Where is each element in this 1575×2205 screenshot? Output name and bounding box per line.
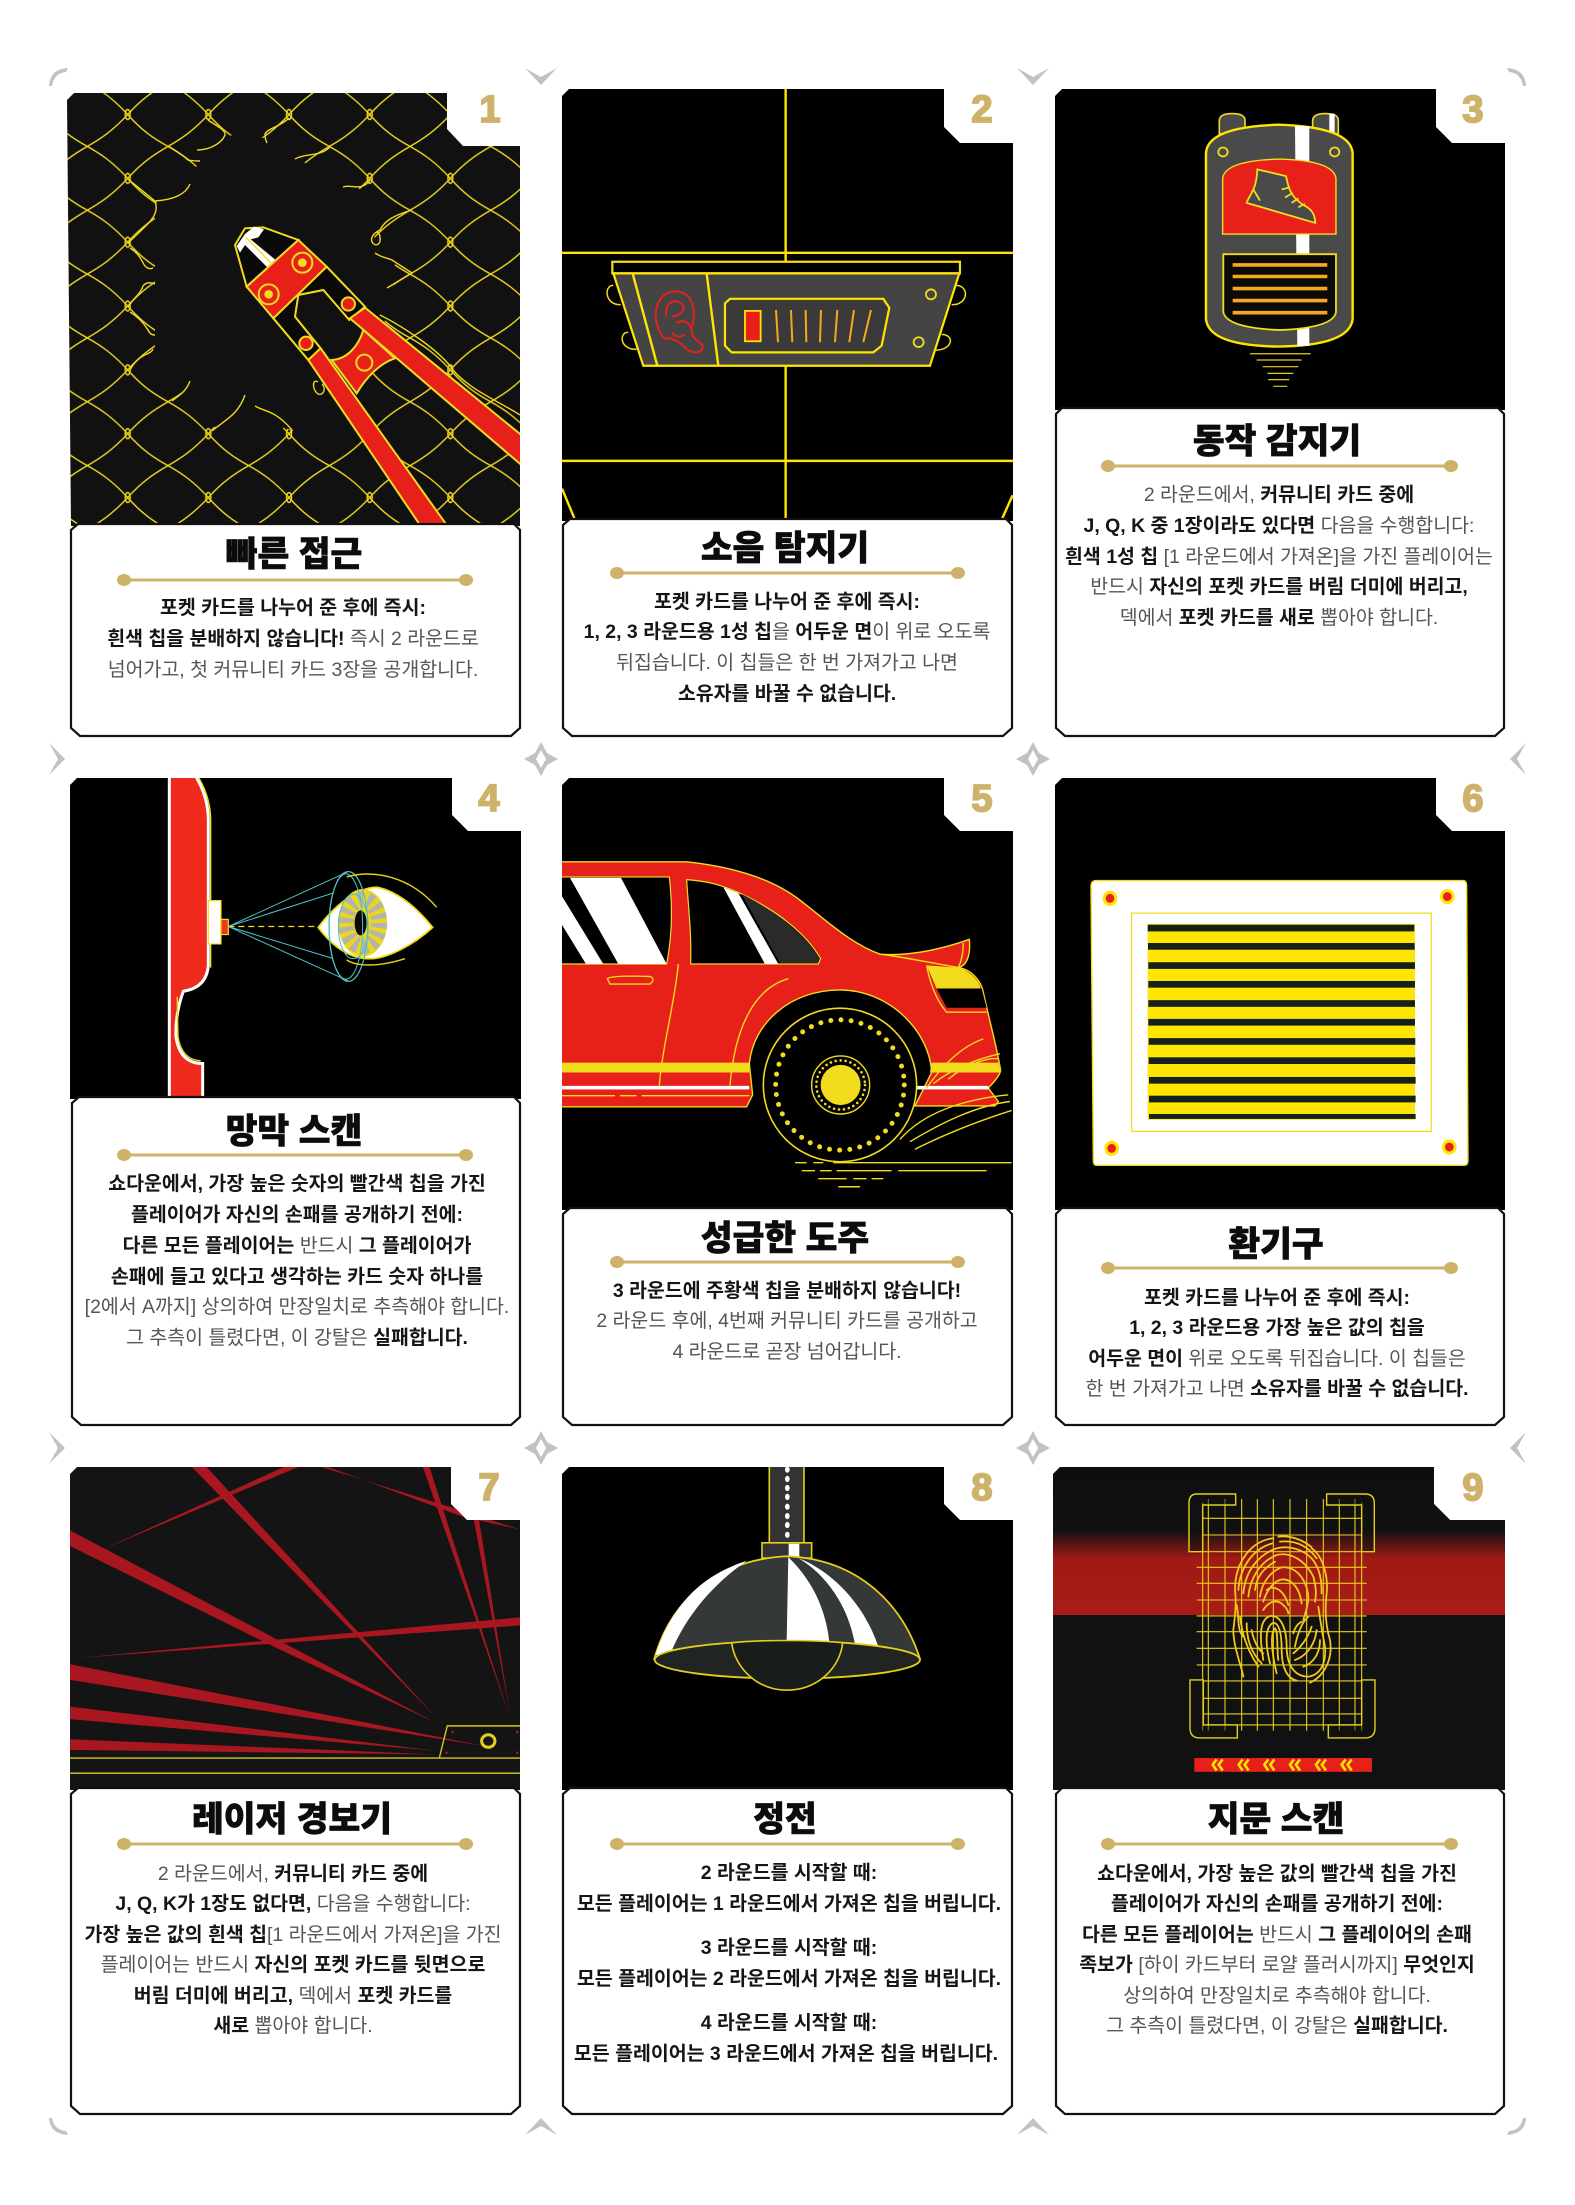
gold divider bbox=[117, 1838, 473, 1850]
body text: 덱에서 포켓 카드를 새로 뽑아야 합니다. bbox=[1120, 607, 1438, 629]
body text: 플레이어는 반드시 자신의 포켓 카드를 뒷면으로 bbox=[101, 1954, 485, 1976]
body text: 반드시 자신의 포켓 카드를 버림 더미에 버리고, bbox=[1090, 576, 1468, 598]
illustration: noise detector device bbox=[560, 85, 1020, 525]
body text: 1, 2, 3 라운드용 1성 칩을 어두운 면이 위로 오도록 bbox=[584, 621, 990, 643]
number badge 3: 3 bbox=[1462, 89, 1484, 131]
body text: 넘어가고, 첫 커뮤니티 카드 3장을 공개합니다. bbox=[108, 659, 478, 681]
illustration: red getaway car bbox=[560, 775, 1020, 1215]
heading: 소음 탐지기 bbox=[701, 530, 869, 568]
gold divider bbox=[610, 1838, 965, 1850]
gold divider bbox=[610, 1256, 965, 1268]
body text: 포켓 카드를 나누어 준 후에 즉시: bbox=[160, 597, 426, 619]
text panel bbox=[71, 1788, 520, 2114]
gold divider bbox=[117, 1149, 473, 1161]
card 8: 정전 bbox=[560, 1460, 1020, 2114]
number badge 7: 7 bbox=[478, 1467, 500, 1509]
body text: 뒤집습니다. 이 칩들은 한 번 가져가고 나면 bbox=[616, 652, 958, 674]
body text: 포켓 카드를 나누어 준 후에 즉시: bbox=[654, 591, 920, 613]
card 7: 레이저 경보기 bbox=[65, 1460, 525, 2114]
illustration: ceiling lamp bbox=[560, 1460, 1020, 1795]
body text: 플레이어가 자신의 손패를 공개하기 전에: bbox=[131, 1204, 463, 1226]
body text: 흰색 칩을 분배하지 않습니다! 즉시 2 라운드로 bbox=[107, 628, 479, 650]
body text: 2 라운드에서, 커뮤니티 카드 중에 bbox=[158, 1863, 428, 1885]
number badge 4: 4 bbox=[478, 778, 500, 820]
body text: 버림 더미에 버리고, 덱에서 포켓 카드를 bbox=[134, 1985, 452, 2007]
body text: J, Q, K가 1장도 없다면, 다음을 수행합니다: bbox=[115, 1893, 471, 1915]
body text: 3 라운드를 시작할 때: bbox=[701, 1937, 877, 1959]
heading: 망막 스캔 bbox=[226, 1113, 362, 1151]
gold divider bbox=[1101, 460, 1458, 472]
heading: 환기구 bbox=[1228, 1226, 1324, 1264]
gold divider bbox=[1101, 1262, 1458, 1274]
heading: 정전 bbox=[753, 1801, 817, 1839]
number badge 1: 1 bbox=[479, 89, 501, 131]
illustration: motion sensor with boot icon bbox=[1050, 85, 1510, 415]
body text: 가장 높은 값의 흰색 칩[1 라운드에서 가져온]을 가진 bbox=[84, 1924, 502, 1946]
card 3: 동작 감지기 bbox=[1050, 85, 1510, 736]
text panel bbox=[563, 519, 1012, 736]
body text: 플레이어가 자신의 손패를 공개하기 전에: bbox=[1111, 1893, 1443, 1915]
body text: 포켓 카드를 나누어 준 후에 즉시: bbox=[1144, 1287, 1410, 1309]
body text: 상의하여 만장일치로 추측해야 합니다. bbox=[1123, 1985, 1431, 2007]
body text: 다른 모든 플레이어는 반드시 그 플레이어의 손패 bbox=[1082, 1924, 1472, 1946]
number badge 2: 2 bbox=[971, 89, 993, 131]
body text: 흰색 1성 칩 [1 라운드에서 가져온]을 가진 플레이어는 bbox=[1065, 546, 1493, 568]
text panel bbox=[1056, 408, 1504, 736]
body text: 2 라운드에서, 커뮤니티 카드 중에 bbox=[1144, 484, 1414, 506]
body text: 쇼다운에서, 가장 높은 숫자의 빨간색 칩을 가진 bbox=[108, 1173, 486, 1195]
body text: 소유자를 바꿀 수 없습니다. bbox=[678, 683, 896, 705]
heading: 동작 감지기 bbox=[1193, 423, 1361, 461]
body text: [2에서 A까지] 상의하여 만장일치로 추측해야 합니다. bbox=[85, 1296, 509, 1318]
card 2: 소음 탐지기 bbox=[560, 85, 1020, 736]
gold divider bbox=[117, 574, 473, 586]
illustration: retina scanner and eye bbox=[65, 773, 525, 1105]
body text: 한 번 가져가고 나면 소유자를 바꿀 수 없습니다. bbox=[1086, 1378, 1468, 1400]
heading: 지문 스캔 bbox=[1208, 1801, 1344, 1839]
card 9: 지문 스캔 bbox=[1050, 1460, 1510, 2114]
body text: 모든 플레이어는 2 라운드에서 가져온 칩을 버립니다. bbox=[577, 1968, 1001, 1990]
body text: 그 추측이 틀렸다면, 이 강탈은 실패합니다. bbox=[1106, 2015, 1448, 2037]
card 6: 환기구 bbox=[1050, 775, 1510, 1425]
card 4: 망막 스캔 bbox=[65, 773, 525, 1425]
body text: 손패에 들고 있다고 생각하는 카드 숫자 하나를 bbox=[111, 1266, 483, 1288]
text panel bbox=[1056, 1208, 1504, 1425]
body text: 2 라운드를 시작할 때: bbox=[701, 1862, 877, 1884]
body text: 4 라운드를 시작할 때: bbox=[701, 2012, 877, 2034]
heading: 레이저 경보기 bbox=[192, 1801, 392, 1839]
illustration: fingerprint scanner bbox=[1050, 1460, 1510, 1795]
text panel bbox=[563, 1208, 1012, 1425]
body text: 그 추측이 틀렸다면, 이 강탈은 실패합니다. bbox=[126, 1327, 468, 1349]
illustration: laser alarm beams bbox=[65, 1460, 525, 1795]
body text: 3 라운드에 주황색 칩을 분배하지 않습니다! bbox=[613, 1280, 961, 1302]
card 1: 빠른 접근 bbox=[60, 89, 530, 736]
body text: 어두운 면이 위로 오도록 뒤집습니다. 이 칩들은 bbox=[1088, 1348, 1466, 1370]
text panel bbox=[72, 1097, 520, 1425]
body text: 모든 플레이어는 1 라운드에서 가져온 칩을 버립니다. bbox=[577, 1893, 1001, 1915]
body text: J, Q, K 중 1장이라도 있다면 다음을 수행합니다: bbox=[1084, 515, 1474, 537]
body text: 족보가 [하이 카드부터 로얄 플러시까지] 무엇인지 bbox=[1079, 1954, 1475, 1976]
body text: 쇼다운에서, 가장 높은 값의 빨간색 칩을 가진 bbox=[1097, 1863, 1457, 1885]
illustration: bolt cutter and chain-link fence bbox=[60, 90, 530, 530]
heading: 성급한 도주 bbox=[701, 1220, 869, 1258]
body text: 4 라운드로 곧장 넘어갑니다. bbox=[672, 1341, 902, 1363]
text panel bbox=[563, 1788, 1012, 2114]
illustration: air vent grille bbox=[1050, 775, 1510, 1215]
body text: 새로 뽑아야 합니다. bbox=[213, 2015, 373, 2037]
text panel bbox=[1056, 1788, 1504, 2114]
body text: 모든 플레이어는 3 라운드에서 가져온 칩을 버립니다. bbox=[574, 2043, 998, 2065]
number badge 5: 5 bbox=[971, 778, 993, 820]
heading: 빠른 접근 bbox=[226, 536, 362, 574]
text panel bbox=[71, 524, 520, 736]
gold divider bbox=[1101, 1838, 1458, 1850]
gold divider bbox=[610, 567, 965, 579]
number badge 6: 6 bbox=[1462, 778, 1484, 820]
body text: 1, 2, 3 라운드용 가장 높은 값의 칩을 bbox=[1129, 1317, 1425, 1339]
card 5: 성급한 도주 bbox=[560, 775, 1020, 1425]
number badge 8: 8 bbox=[971, 1467, 993, 1509]
number badge 9: 9 bbox=[1462, 1467, 1484, 1509]
body text: 다른 모든 플레이어는 반드시 그 플레이어가 bbox=[123, 1235, 471, 1257]
body text: 2 라운드 후에, 4번째 커뮤니티 카드를 공개하고 bbox=[596, 1310, 978, 1332]
